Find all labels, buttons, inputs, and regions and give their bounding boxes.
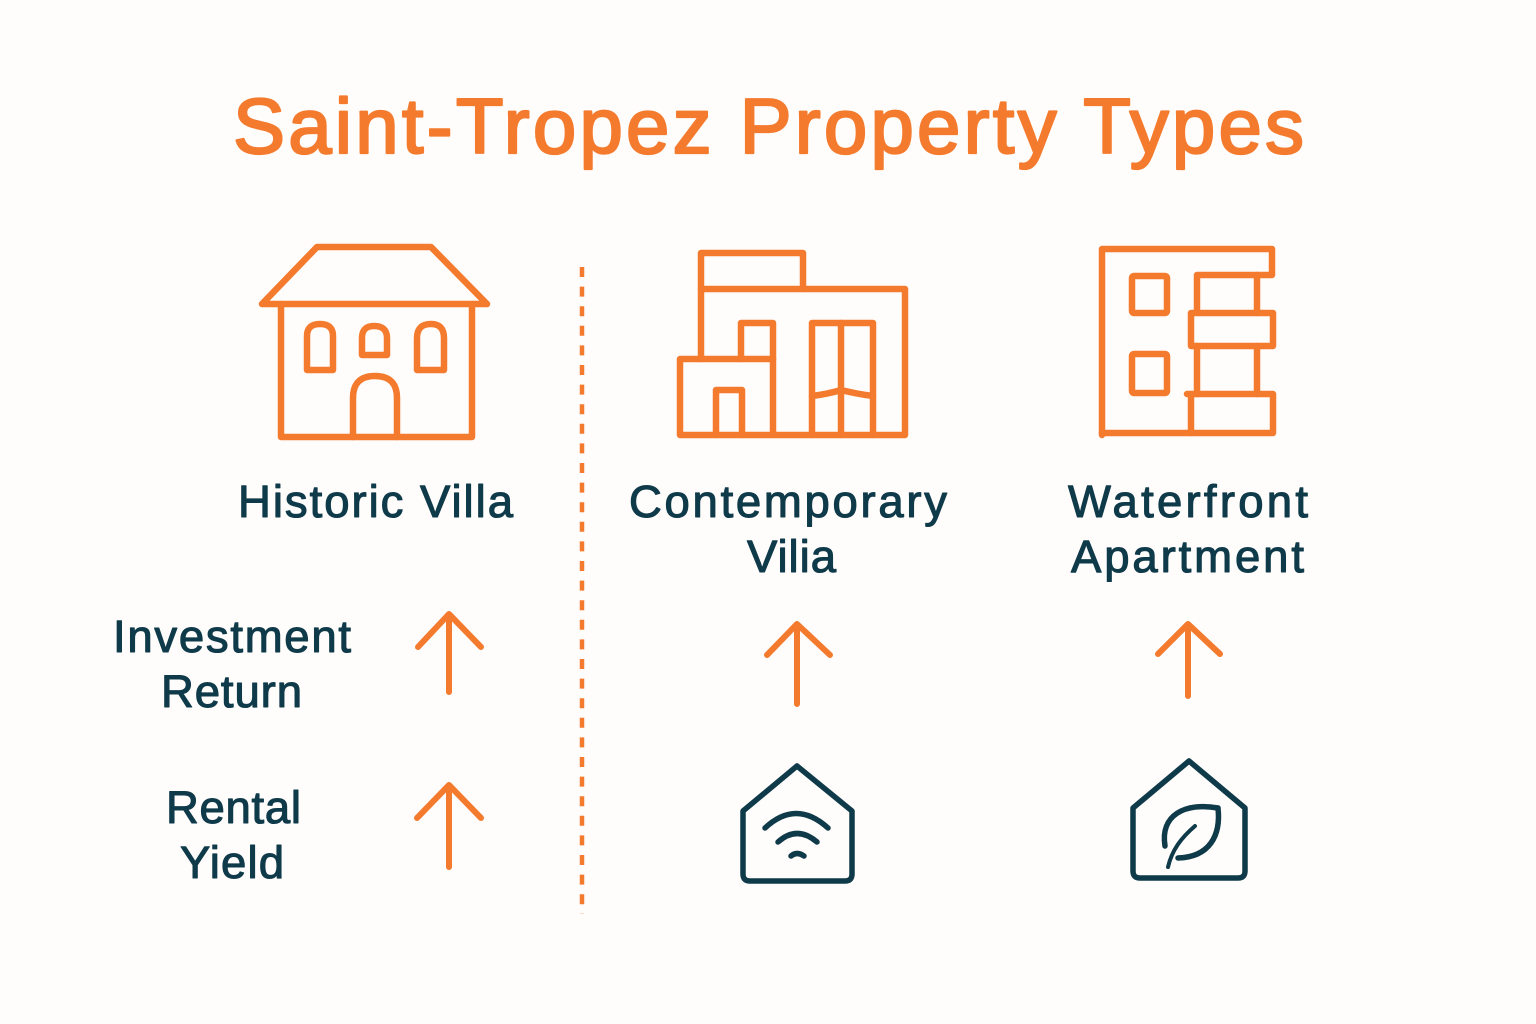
- label: Historic Villa: Historic Villa: [238, 476, 514, 527]
- label: Investment Return: Investment: [113, 611, 351, 662]
- row: investment return: [113, 611, 1220, 717]
- arrow: contemporary villa investment return up: [767, 624, 830, 704]
- row: rental yield: [166, 761, 1245, 888]
- panel: contemporary villa: [629, 253, 947, 582]
- label: Rental Yield: Rental: [166, 782, 301, 833]
- label: Contemporary Vilia: [629, 476, 947, 582]
- arrow: waterfront apartment investment return up: [1158, 624, 1220, 696]
- label: Contemporary Vilia: Vilia: [747, 531, 837, 582]
- icon: contemporary villa building: [680, 253, 905, 435]
- panel: historic villa: [238, 247, 514, 527]
- label: Investment Return: [113, 611, 351, 717]
- title: Saint-Tropez Property Types: [233, 82, 1304, 170]
- label: Waterfront Apartment: Apartment: [1071, 531, 1304, 582]
- label: Rental Yield: [166, 782, 301, 888]
- label: Rental Yield: Yield: [180, 837, 284, 888]
- label: Waterfront Apartment: [1068, 476, 1308, 582]
- panel: waterfront apartment: [1068, 249, 1308, 582]
- icon: historic villa house: [262, 247, 487, 437]
- icon: smart home wifi: [743, 766, 852, 881]
- arrow: historic villa rental yield up: [417, 785, 481, 867]
- label: Waterfront Apartment: Waterfront: [1068, 476, 1308, 527]
- label: Investment Return: Return: [161, 666, 302, 717]
- label: Contemporary Vilia: Contemporary: [629, 476, 947, 527]
- icon: eco home leaf: [1133, 761, 1245, 878]
- arrow: historic villa investment return up: [418, 614, 481, 692]
- icon: waterfront apartment building: [1102, 249, 1273, 435]
- divider: dashed line: [580, 267, 584, 914]
